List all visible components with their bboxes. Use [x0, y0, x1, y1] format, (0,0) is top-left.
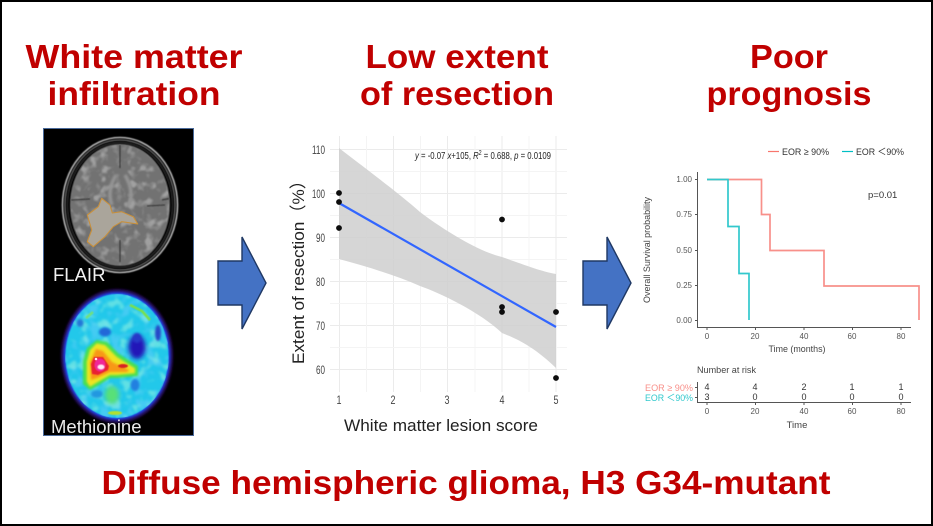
- number at risk table: 1: [898, 382, 904, 392]
- number at risk table: 4: [752, 382, 758, 392]
- p value: p=0.01: [868, 190, 897, 201]
- heading: low extent of resection: [360, 38, 554, 112]
- number at risk table: 20: [751, 407, 760, 416]
- number at risk table: 80: [897, 407, 906, 416]
- number at risk table: 4: [704, 382, 710, 392]
- number at risk table: 1: [849, 382, 855, 392]
- number at risk table: 2: [801, 382, 807, 392]
- scatter gridlines: [330, 136, 567, 392]
- heading: poor prognosis: prognosis: [706, 75, 872, 112]
- arrow: imaging to resection: [218, 237, 266, 329]
- heading: poor prognosis: [706, 38, 872, 112]
- survival y ticks: 1.00: [676, 175, 693, 184]
- number at risk table: 0: [752, 392, 758, 402]
- x axis tick labels: 1: [336, 393, 342, 407]
- regression equation: y = -0.07 x+105, R: [415, 150, 481, 162]
- heading: low extent of resection: Low extent: [366, 38, 548, 75]
- data points: [336, 190, 559, 381]
- survival legend: [768, 147, 905, 158]
- survival x ticks: 60: [848, 332, 857, 341]
- survival x ticks: 20: [751, 332, 760, 341]
- survival legend: EOR ≥ 90%: [782, 147, 830, 158]
- y axis tick labels: 100: [312, 187, 325, 201]
- x axis tick labels: [336, 393, 559, 407]
- survival x ticks: 40: [800, 332, 809, 341]
- x axis title: White matter lesion score: [344, 417, 538, 435]
- regression equation: 2: [479, 150, 482, 157]
- number at risk table: 40: [800, 407, 809, 416]
- number at risk table: Time: [787, 420, 807, 431]
- number at risk table: 60: [848, 407, 857, 416]
- survival y ticks: 0.00: [676, 316, 693, 325]
- survival y ticks: 0.50: [676, 246, 693, 255]
- arrow: resection to prognosis: [583, 237, 631, 329]
- survival axes: [698, 172, 911, 328]
- image: methionine PET scan: [61, 289, 173, 423]
- y axis tick labels: 70: [316, 319, 325, 333]
- panel: brain imaging: [44, 128, 194, 437]
- heading: white matter infiltration: infiltration: [48, 75, 220, 112]
- heading: low extent of resection: of resection: [360, 75, 554, 112]
- survival y axis title: Overall Survival probability: [642, 197, 653, 303]
- y axis tick labels: 90: [316, 231, 325, 245]
- curve: EOR at least 90 percent: [707, 180, 919, 320]
- tumor outline on FLAIR: [87, 198, 138, 247]
- x axis tick labels: 4: [500, 393, 505, 407]
- number at risk table: Number at risk: [697, 365, 756, 376]
- survival legend: EOR ＜90%: [856, 147, 905, 158]
- x axis tick labels: 2: [390, 393, 396, 407]
- survival y ticks: 0.75: [676, 210, 693, 219]
- footer title: Diffuse hemispheric glioma, H3 G34-mutant: [102, 464, 831, 501]
- curve: EOR below 90 percent: [707, 180, 749, 320]
- survival x ticks: 80: [897, 332, 906, 341]
- label: FLAIR: FLAIR: [53, 264, 105, 285]
- y axis tick labels: 60: [316, 363, 325, 377]
- confidence band: [339, 148, 556, 368]
- x axis tick labels: 5: [554, 393, 559, 407]
- y axis tick labels: 110: [312, 143, 325, 157]
- heading: poor prognosis: Poor: [750, 38, 828, 75]
- y axis tick labels: 80: [316, 275, 325, 289]
- y axis tick labels: [312, 143, 325, 377]
- number at risk table: 3: [704, 392, 710, 402]
- number at risk table: 0: [898, 392, 904, 402]
- regression line: [339, 203, 556, 327]
- survival x ticks: [705, 328, 906, 341]
- survival y ticks: 0.25: [676, 281, 693, 290]
- heading: white matter infiltration: White matter: [26, 38, 243, 75]
- regression equation: = 0.688,: [482, 150, 514, 162]
- survival x axis title: Time (months): [768, 344, 826, 355]
- label: Methionine: Methionine: [51, 416, 142, 437]
- number at risk table: [645, 365, 911, 431]
- regression equation: p = 0.0109: [514, 150, 563, 162]
- number at risk table: 0: [705, 407, 710, 416]
- number at risk table: 0: [801, 392, 807, 402]
- x axis tick labels: 3: [444, 393, 450, 407]
- number at risk table: 0: [849, 392, 855, 402]
- y axis title: Extent of resection（%）: [289, 172, 308, 364]
- number at risk table: EOR ≥ 90%: [645, 383, 694, 394]
- chart: Kaplan-Meier survival curve: [642, 147, 919, 431]
- number at risk table: EOR ＜90%: [645, 393, 694, 404]
- survival x ticks: 0: [705, 332, 710, 341]
- chart: scatter plot of extent of resection vs white matter lesion score: [289, 136, 567, 435]
- survival y ticks: [676, 175, 698, 325]
- image: FLAIR MRI brain scan: [62, 138, 178, 272]
- heading: white matter infiltration: [26, 38, 243, 112]
